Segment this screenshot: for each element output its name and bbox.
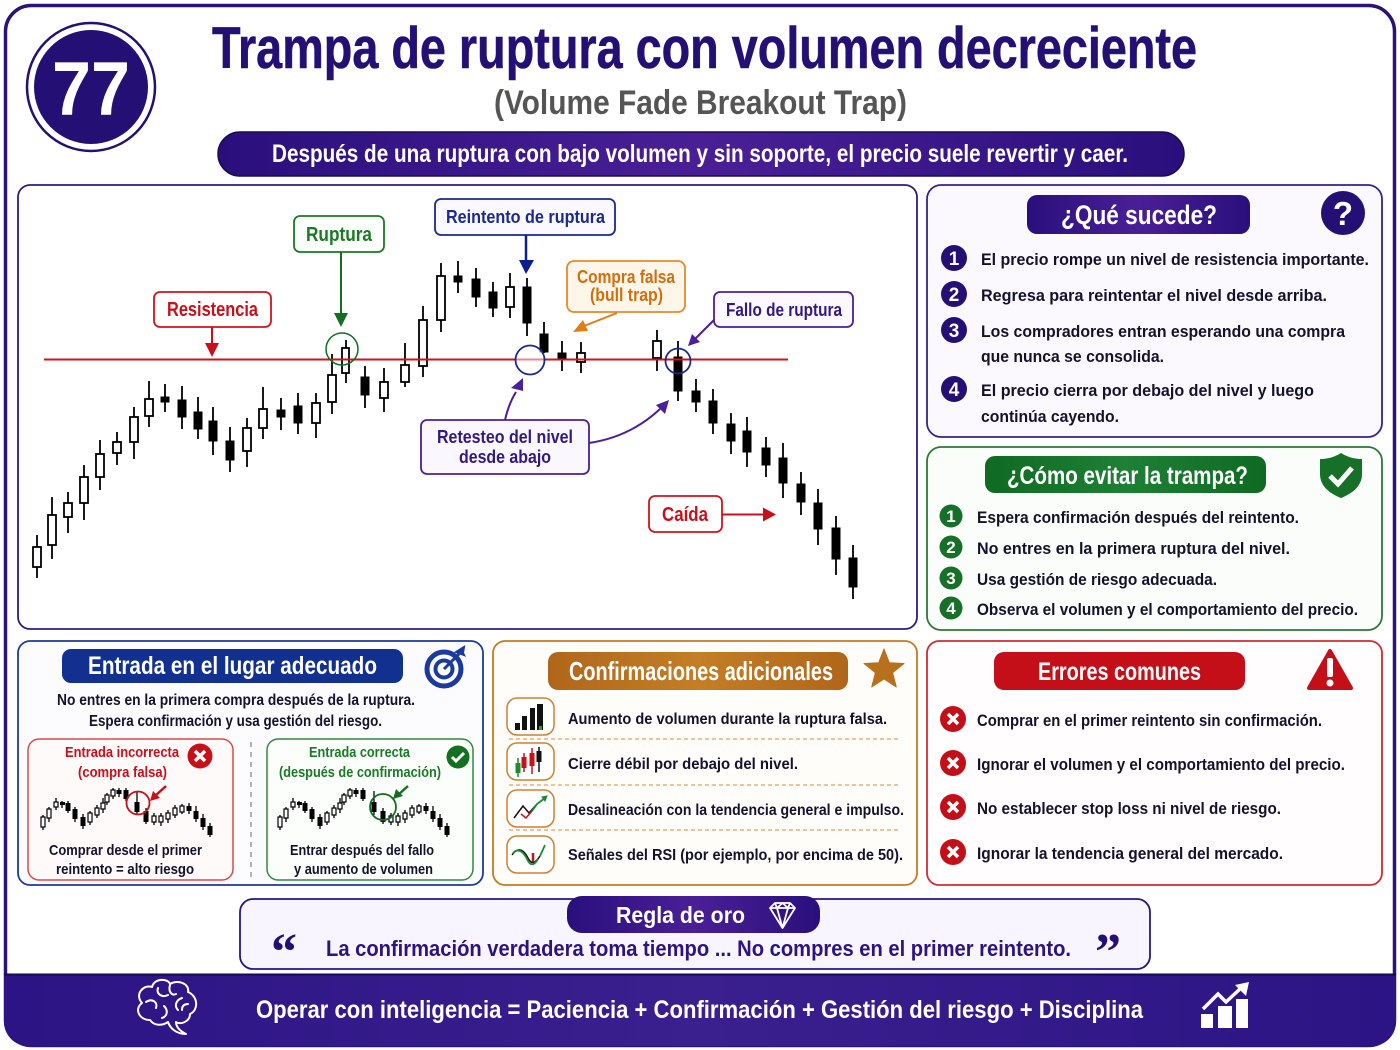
card: wrong entry: Comprar desde el primer [49,842,202,859]
card: correct entry: Entrar después del fallo [290,842,434,859]
list: what happens: 1 [949,249,960,270]
icon: shield [1320,453,1362,498]
list: what happens: que nunca se consolida. [981,347,1164,366]
subtitle: (Volume Fade Breakout Trap) [494,84,907,122]
panel: qué sucede [927,185,1382,437]
number badge 77: 77 [52,47,130,132]
list: how to avoid: Espera confirmación después del reintento. [977,508,1299,527]
footer band [4,974,1396,1046]
heading [985,456,1266,493]
list: what happens: 3 [949,321,959,342]
card: wrong entry: reintento = alto riesgo [56,861,194,878]
panel: entrada en el lugar adecuado [18,641,483,885]
summary banner [218,132,1184,176]
text: row 1: Aumento de volumen durante la ruptura falsa. [568,711,887,728]
list: mistakes: No establecer stop loss ni nivel de riesgo. [977,799,1281,818]
label: Caída [649,496,776,532]
number badge 77 [27,23,155,151]
label: Ruptura [294,216,384,365]
title: Trampa de ruptura con volumen decreciente [212,16,1197,81]
intro text: Espera confirmación y usa gestión del riesgo. [89,713,382,730]
label: Compra falsa: Compra falsa [577,267,676,287]
heading: Entrada en el lugar adecuado [88,652,377,680]
label: Resistencia: Resistencia [167,299,259,321]
heading: Confirmaciones adicionales [569,656,833,686]
summary banner: Después de una ruptura con bajo volumen y sin soporte, el precio suele revertir y caer. [272,140,1128,168]
list: what happens [941,245,1369,426]
list: how to avoid: Usa gestión de riesgo adecuada. [977,570,1217,589]
icon: question mark [1321,191,1365,235]
list: what happens: El precio cierra por debajo del nivel y luego [981,381,1314,400]
footer text: Operar con inteligencia = Paciencia + Confirmación + Gestión del riesgo + Disciplina [256,996,1144,1024]
panel: confirmaciones adicionales [493,641,917,885]
text: row 3: Desalineación con la tendencia general e impulso. [568,802,904,819]
list: what happens: Los compradores entran esperando una compra [981,322,1345,341]
quote mark close: ” [1095,924,1121,981]
label: Compra falsa [567,261,685,332]
card: correct entry: (después de confirmación) [279,764,441,781]
card: wrong entry: (compra falsa) [78,764,167,781]
resistance line [44,358,788,360]
list: what happens: El precio rompe un nivel de resistencia importante. [981,250,1369,269]
label: Compra falsa: (bull trap) [590,285,663,305]
panel: regla de oro [240,896,1150,981]
list: mistakes [940,706,1345,865]
list: how to avoid: 4 [946,599,956,618]
heading: ¿Cómo evitar la trampa? [1007,462,1248,490]
label: Caída: Caída [662,504,709,526]
icon: trend line [507,790,554,827]
list: how to avoid: 1 [946,507,956,526]
card: wrong entry: Entrada incorrecta [65,744,180,761]
label: Ruptura: Ruptura [306,224,373,246]
quote mark open: “ [271,924,297,981]
label: Resistencia [154,292,271,357]
list: what happens: continúa cayendo. [981,407,1119,426]
list: mistakes: Comprar en el primer reintento sin confirmación. [977,711,1322,730]
label: Fallo de ruptura: Fallo de ruptura [726,300,843,320]
card: correct entry: y aumento de volumen [294,861,433,878]
icon: diamond [770,903,795,928]
heading [1027,195,1250,234]
icon: target [427,647,464,686]
label: Reintento de ruptura: Reintento de ruptura [446,207,606,227]
label: Retesteo del nivel: desde abajo [459,447,551,467]
quote text: La confirmación verdadera toma tiempo ... No compres en el primer reintento. [326,936,1071,961]
panel: candlestick chart [18,185,917,629]
candlestick series [33,261,857,599]
heading: Errores comunes [1038,658,1201,686]
icon: growth chart [1201,982,1249,1028]
list: how to avoid: Observa el volumen y el comportamiento del precio. [977,600,1358,619]
card: correct entry: Entrada correcta [309,744,411,761]
heading [548,652,848,690]
text: row 2: Cierre débil por debajo del nivel. [568,756,798,773]
icon: star [864,649,904,687]
text: row 4: Señales del RSI (por ejemplo, por encima de 50). [568,847,903,864]
list: what happens: 2 [949,285,959,306]
list: how to avoid [940,504,1358,620]
panel: errores comunes [927,641,1382,885]
label: Retesteo del nivel [421,378,669,474]
heading [567,896,820,933]
intro text: No entres en la primera compra después de la ruptura. [57,692,415,709]
heading: ¿Qué sucede? [1061,200,1217,230]
icon: warning [1309,651,1351,688]
list: how to avoid: No entres en la primera ruptura del nivel. [977,539,1290,558]
panel: cómo evitar [927,447,1382,630]
icon: volume bars [507,698,554,735]
list: mistakes: Ignorar la tendencia general del mercado. [977,844,1283,863]
list: how to avoid: 3 [946,569,956,588]
heading: Regla de oro [616,902,745,928]
icon: candles [507,743,554,780]
label: Fallo de ruptura [666,292,853,374]
list: how to avoid: 2 [946,538,956,557]
icon: RSI curve [507,836,554,873]
icon: brain [138,980,196,1034]
heading [994,652,1245,690]
label: Retesteo del nivel: Retesteo del nivel [437,427,573,447]
card: wrong entry [28,739,233,880]
list: mistakes: Ignorar el volumen y el comportamiento del precio. [977,755,1345,774]
list: what happens: Regresa para reintentar el nivel desde arriba. [981,286,1327,305]
label: Reintento de ruptura [435,199,615,374]
intro text [57,692,415,730]
icon: question mark: ? [1333,195,1353,232]
card: correct entry [267,739,473,880]
list: what happens: 4 [949,380,960,401]
